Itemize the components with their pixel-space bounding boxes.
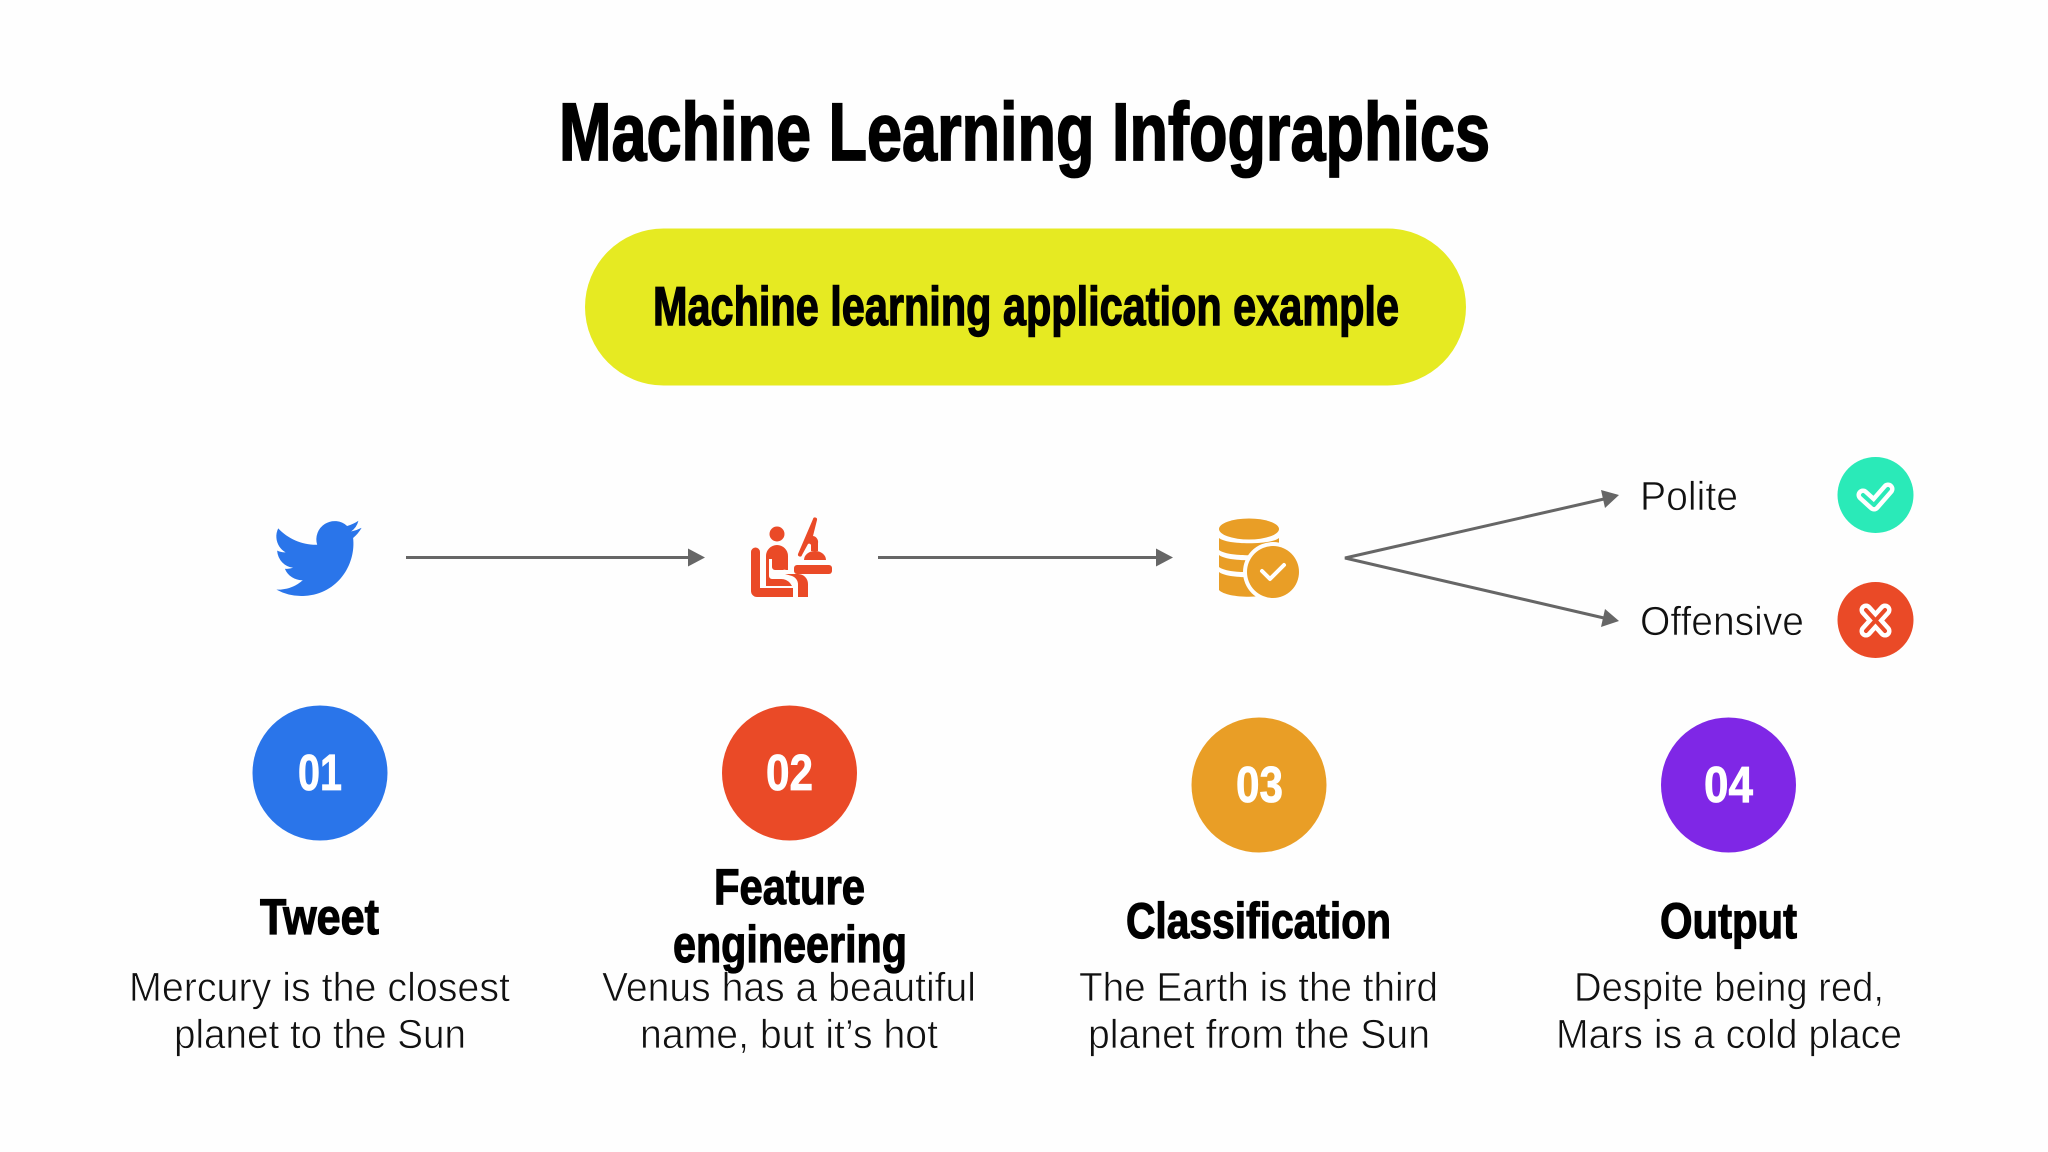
number badge 02: 02 <box>766 744 813 801</box>
heading: feature engineering <box>673 859 907 974</box>
number badge 02 <box>722 706 857 840</box>
number badge 04 <box>1661 718 1796 852</box>
description: output: Despite being red, <box>1574 964 1884 1010</box>
description: tweet <box>129 964 511 1057</box>
icon: twitter bird <box>272 519 366 598</box>
number badge 04: 04 <box>1704 756 1754 813</box>
description: feature engineering <box>602 964 976 1057</box>
icon: database with check <box>1219 518 1303 602</box>
heading: output: Output <box>1660 893 1797 949</box>
icon: person at desk with lamp <box>751 517 832 597</box>
arrow: feature engineering to classification <box>878 548 1173 566</box>
description: tweet: Mercury is the closest <box>129 964 511 1010</box>
column: 02 feature engineering <box>602 706 976 1057</box>
title: Machine Learning Infographics <box>559 87 1490 178</box>
description: classification: planet from the Sun <box>1088 1011 1430 1057</box>
column: 01 tweet <box>129 706 511 1057</box>
description: classification: The Earth is the third <box>1079 964 1438 1010</box>
label: offensive: Offensive <box>1640 598 1804 644</box>
description: classification <box>1079 964 1438 1057</box>
column: 03 classification <box>1079 718 1438 1057</box>
number badge 01 <box>252 706 388 840</box>
description: feature engineering: Venus has a beautiful <box>602 964 976 1010</box>
heading: classification: Classification <box>1126 893 1391 949</box>
number badge 03 <box>1192 718 1326 852</box>
number badge 01: 01 <box>298 744 342 801</box>
subtitle pill <box>585 228 1466 386</box>
heading: tweet: Tweet <box>260 889 379 945</box>
arrows: classification to output branches <box>1345 490 1619 627</box>
heading: feature engineering: Feature <box>714 859 865 915</box>
icon: teal check badge <box>1838 457 1914 533</box>
description: feature engineering: name, but it’s hot <box>640 1011 939 1057</box>
heading: feature engineering: engineering <box>673 916 907 974</box>
description: tweet: planet to the Sun <box>174 1011 466 1057</box>
arrow: tweet to feature engineering <box>406 548 705 566</box>
label: polite: Polite <box>1640 473 1738 519</box>
icon: red cross badge <box>1838 582 1914 658</box>
description: output: Mars is a cold place <box>1556 1011 1902 1057</box>
subtitle pill: Machine learning application example <box>653 275 1399 337</box>
description: output <box>1556 964 1902 1057</box>
column: 04 output <box>1556 718 1902 1057</box>
number badge 03: 03 <box>1236 756 1283 813</box>
